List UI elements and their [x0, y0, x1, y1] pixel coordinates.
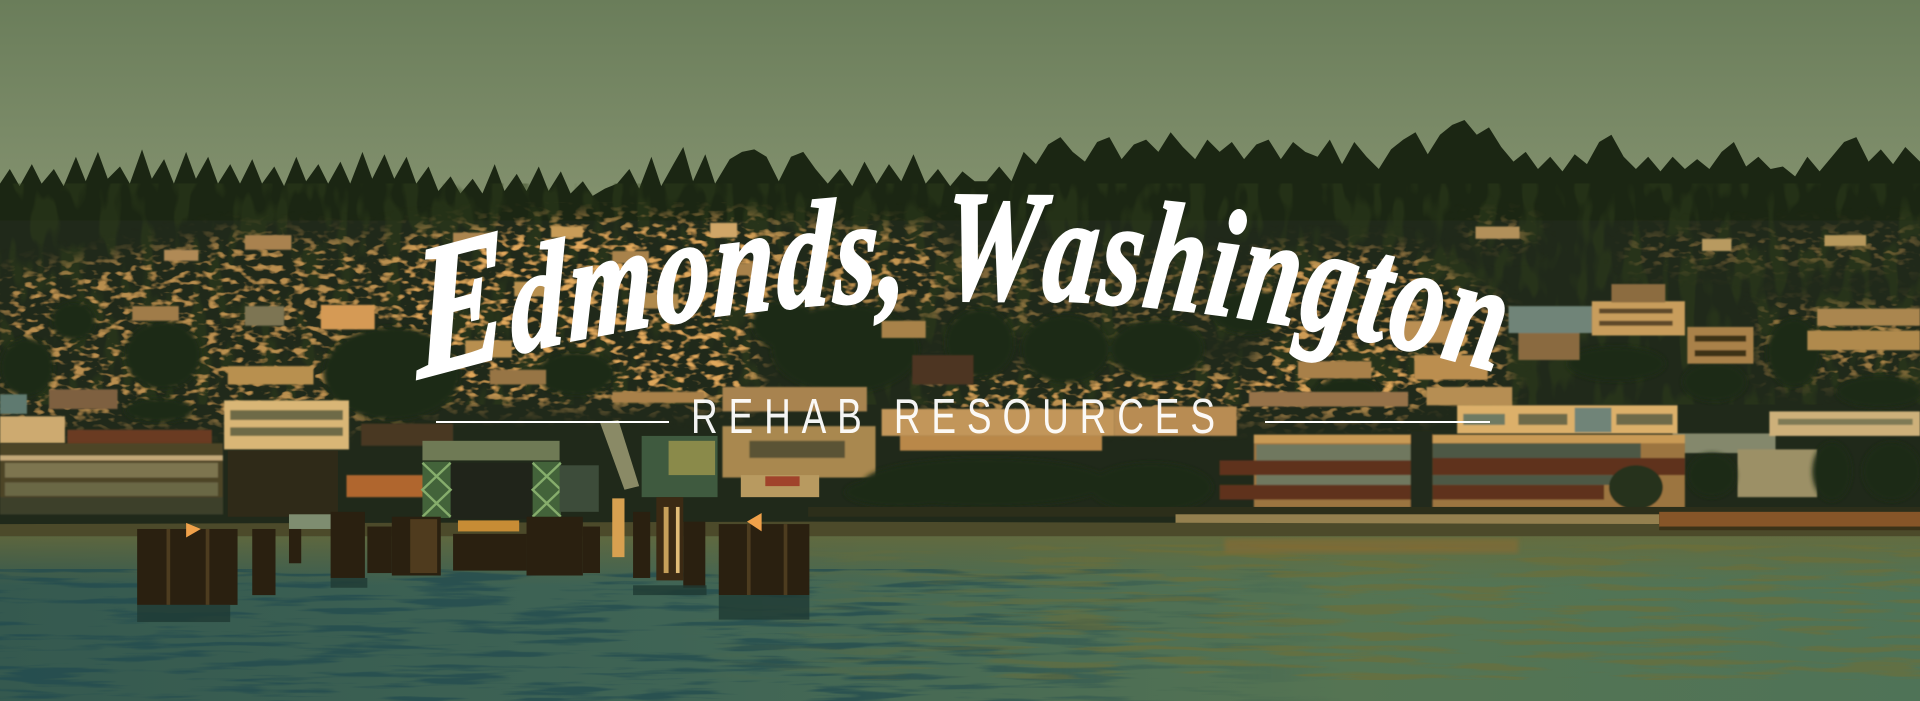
orange reflection of building	[1224, 539, 1518, 553]
title: Edmonds, Washington	[416, 194, 1505, 380]
water	[0, 536, 1920, 701]
pier pilings	[137, 497, 809, 605]
piling reflections	[137, 578, 809, 622]
forest tree line	[0, 120, 1920, 367]
mid-level waterfront buildings	[0, 387, 1920, 497]
forest texture	[0, 184, 1920, 404]
beach	[0, 522, 1920, 541]
hillside houses	[0, 223, 1920, 414]
subtitle: REHAB RESOURCES	[691, 390, 1215, 444]
sea wall	[1176, 514, 1659, 524]
ferry pier structure	[289, 420, 819, 557]
brown office building	[1220, 431, 1685, 511]
shoreline reflection	[0, 536, 1920, 585]
right rule	[1265, 421, 1490, 423]
foreshore embankment	[808, 507, 1920, 517]
title	[416, 194, 1505, 380]
left rule	[436, 421, 669, 423]
orange ferry terminal building	[347, 475, 465, 497]
left apartment row	[0, 443, 223, 514]
shrubs by the beach	[845, 442, 1920, 512]
warning markers	[186, 513, 762, 538]
dark building beside apartments	[228, 451, 338, 517]
dark tree clusters	[0, 290, 1920, 422]
water ripples	[0, 545, 1920, 701]
hillside house texture	[0, 202, 1920, 434]
orange dock	[1659, 512, 1920, 530]
sky	[0, 0, 1920, 214]
hillside base	[0, 220, 1920, 541]
